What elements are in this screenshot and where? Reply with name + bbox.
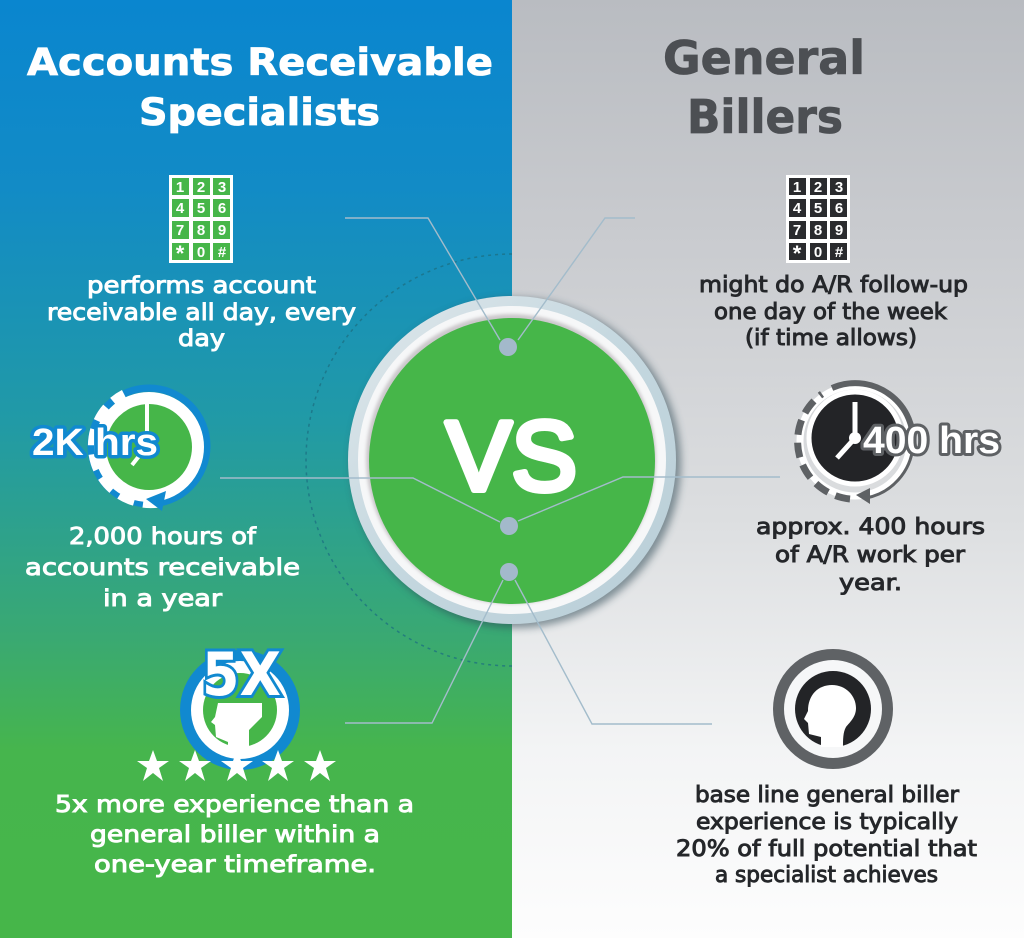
text: 5x more experience: general biller within a: [90, 822, 380, 848]
text: might do A/R follow-up: [699, 273, 968, 351]
five stars: [137, 750, 336, 781]
icon: green keypad: 3: [218, 179, 226, 196]
icon: green keypad: #: [218, 244, 227, 261]
title: general billers: Billers: [687, 90, 843, 144]
icon: green keypad: 2: [197, 179, 205, 196]
icon: dark keypad: 4: [793, 200, 802, 217]
VS badge: [348, 296, 681, 628]
icon: green keypad: 1: [176, 179, 184, 196]
text: approx. 400 hours: approx. 400 hours: [756, 515, 985, 540]
text: 5x more experience: 5x more experience than a: [55, 792, 414, 818]
icon: head in ring: [773, 649, 893, 769]
text: base line general biller: 20% of full potential that: [676, 837, 977, 862]
text: performs account receivable: receivable all day, every: [47, 300, 356, 326]
icon: dark keypad: 5: [814, 200, 822, 217]
text: might do A/R follow-up: might do A/R follow-up: [699, 273, 968, 298]
icon: 5X head with stars: [137, 640, 336, 781]
panel: general billers background: [512, 0, 1024, 938]
text: approx. 400 hours: year.: [839, 571, 902, 596]
text: 2,000 hours: accounts receivable: [25, 555, 300, 581]
icon: dark keypad: 9: [835, 222, 843, 239]
text: 2,000 hours: in a year: [103, 586, 223, 612]
label: 5X: 5X: [202, 640, 281, 710]
text: base line general biller: [676, 783, 977, 888]
title: accounts receivable specialists: [27, 41, 493, 134]
icon: green keypad: 9: [218, 222, 226, 239]
panel: accounts receivable specialists background: [0, 0, 512, 938]
title: general billers: [663, 31, 865, 144]
icon: dark keypad: 6: [835, 200, 843, 217]
icon: green keypad: 8: [197, 222, 205, 239]
text: might do A/R follow-up: one day of the week: [714, 300, 947, 325]
icon: dark keypad: 0: [814, 244, 822, 261]
icon: 400 hrs clock: [798, 383, 1000, 504]
text: base line general biller: a specialist achieves: [715, 863, 938, 888]
text: approx. 400 hours: [756, 515, 985, 596]
icon: dark keypad: 3: [835, 179, 843, 196]
connector dots: [499, 338, 518, 581]
icon: green keypad: 0: [197, 244, 205, 261]
text: 5x more experience: [55, 792, 414, 878]
icon: green keypad: *: [176, 241, 185, 266]
VS label: VS: [446, 401, 577, 511]
text: base line general biller: base line general biller: [695, 783, 960, 808]
connector lines: [220, 218, 780, 724]
text: 2,000 hours: [25, 524, 300, 612]
text: performs account receivable: day: [178, 326, 225, 352]
icon: green keypad: [169, 175, 233, 266]
icon: green keypad: 5: [197, 200, 205, 217]
text: might do A/R follow-up: (if time allows): [745, 326, 917, 351]
text: base line general biller: experience is typically: [696, 810, 958, 835]
title: accounts receivable specialists: Specialists: [139, 91, 380, 134]
text: performs account receivable: [47, 273, 356, 352]
icon: green keypad: 7: [176, 222, 184, 239]
icon: dark keypad: 8: [814, 222, 822, 239]
text: performs account receivable: performs account: [87, 273, 316, 299]
text: 2,000 hours: 2,000 hours of: [69, 524, 257, 550]
icon: dark keypad: 1: [793, 179, 801, 196]
dotted orbit ring: [306, 254, 512, 666]
icon: green keypad: 4: [176, 200, 185, 217]
icon: dark keypad: [786, 175, 850, 266]
icon: 2K hrs clock: [32, 388, 207, 511]
icon: dark keypad: #: [835, 244, 844, 261]
icon: green keypad: 6: [218, 200, 226, 217]
icon: dark keypad: 7: [793, 222, 801, 239]
icon: dark keypad: 2: [814, 179, 822, 196]
title: general billers: General: [663, 31, 865, 85]
label: 400 hrs: 400 hrs: [863, 420, 1000, 462]
text: approx. 400 hours: of A/R work per: [775, 543, 966, 568]
title: accounts receivable specialists: Accounts Receivable: [27, 41, 493, 84]
text: 5x more experience: one-year timeframe.: [94, 852, 376, 878]
label: 2K hrs: 2K hrs: [32, 422, 158, 464]
icon: dark keypad: *: [793, 241, 802, 266]
